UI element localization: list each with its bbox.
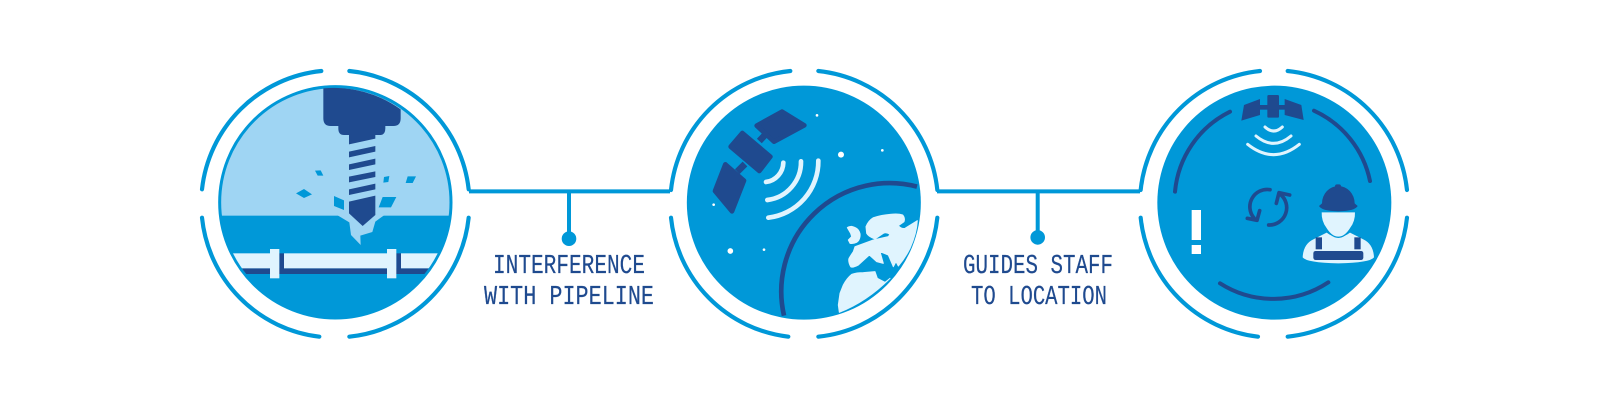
signal waves xyxy=(766,161,818,218)
label: interference with pipeline xyxy=(484,251,654,312)
worker xyxy=(1303,184,1374,263)
atmosphere arc xyxy=(781,183,917,316)
panel: staff guidance icon xyxy=(1141,71,1407,337)
label: interference with pipeline: WITH PIPELINE xyxy=(484,282,654,312)
continents xyxy=(838,214,917,312)
exclamation mark xyxy=(1192,210,1201,254)
signal waves xyxy=(1248,127,1299,155)
ground crack xyxy=(338,215,384,245)
pipeline xyxy=(233,249,438,278)
panel: drilling interference icon xyxy=(202,71,469,337)
outer ring segments xyxy=(202,71,469,337)
outer ring segments xyxy=(671,71,937,337)
label: interference with pipeline: INTERFERENCE xyxy=(493,251,645,281)
label: guides staff to location: GUIDES STAFF xyxy=(963,251,1113,281)
background disc xyxy=(1157,86,1391,320)
sync arrows xyxy=(1247,189,1290,225)
outer ring segments xyxy=(1141,71,1407,337)
label: guides staff to location xyxy=(963,251,1113,312)
satellite xyxy=(1241,95,1304,121)
satellite xyxy=(715,112,804,211)
connector: second to third panel xyxy=(937,191,1140,243)
ground xyxy=(222,216,449,316)
stars xyxy=(712,114,884,254)
space background xyxy=(687,86,921,320)
sky background xyxy=(220,87,451,318)
debris fragments xyxy=(296,170,416,210)
process ring arcs xyxy=(1175,111,1370,299)
label: guides staff to location: TO LOCATION xyxy=(971,282,1107,312)
connector: first to second panel xyxy=(469,191,670,244)
panel: satellite and earth icon xyxy=(671,71,937,337)
drill bit xyxy=(323,88,401,226)
